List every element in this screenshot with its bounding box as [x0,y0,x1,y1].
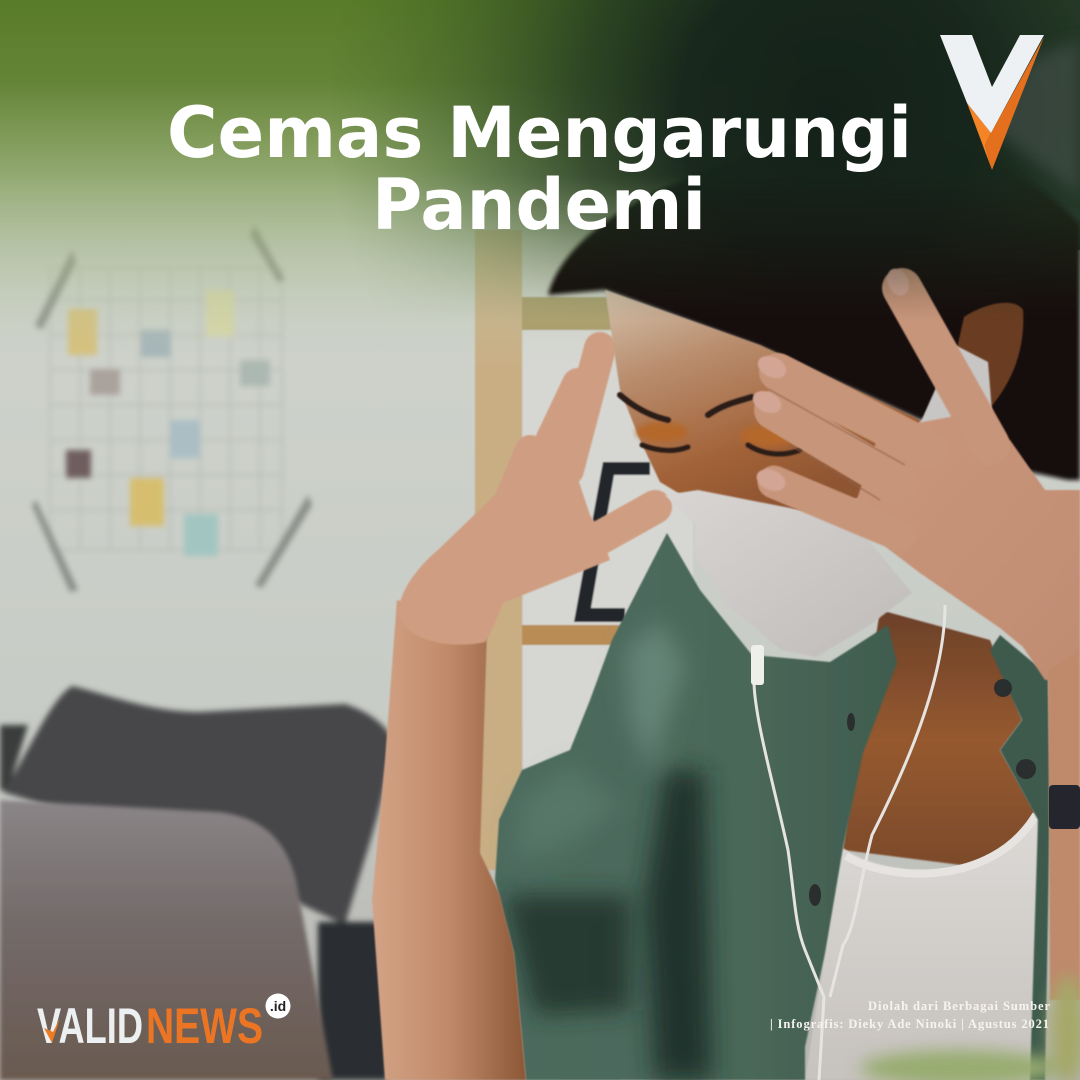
top green gradient overlay [0,0,1080,370]
collar band [846,815,1036,874]
wooden shelf [475,230,693,1080]
left forearm [372,600,526,1080]
ear [950,303,1023,408]
blurred foreground foliage [860,975,1080,1080]
shirt shadows and folds [505,620,712,1080]
right hand and fingers [749,265,1080,1000]
earphone jack [751,645,764,685]
dark top-right gradient overlay [361,0,1080,312]
face mask [665,490,912,657]
green shirt [495,533,1050,1080]
face [605,290,920,510]
sofa [0,686,392,1080]
ValidNews.id logo [37,994,290,1054]
dark wall at upper right [760,0,1080,250]
source credit: | Infografis: Dieky Ade Ninoki | Agustus 2021 [770,1017,1049,1031]
finger separation shadows [770,390,905,500]
title: Pandemi [372,164,706,246]
source credit: Diolah dari Berbagai Sumber [868,999,1050,1013]
hair [548,133,1080,480]
eye makeup shadows [636,422,796,447]
title: Cemas Mengarungi [167,92,912,174]
.id badge: .id [270,998,286,1014]
eyes and brows [620,395,800,454]
mask ear strap [918,345,992,440]
shirt buttons [809,679,1036,906]
.id badge [266,994,290,1018]
laptop [0,800,333,1080]
chest skin [843,610,1035,870]
pale wall patch at upper right [985,40,1080,195]
woman figure [372,133,1080,1080]
title [167,92,912,246]
Valid logo V mark [940,35,1044,170]
white top [805,810,1042,1080]
ValidNews.id logo: VALID [37,998,143,1054]
watch band [1049,785,1080,829]
earphone wire [754,605,945,1080]
wall grid with pinned notes [32,225,312,592]
ValidNews.id logo: NEWS [146,998,263,1054]
left hand [398,348,655,645]
source credit [770,999,1050,1031]
fingernails [749,265,913,495]
